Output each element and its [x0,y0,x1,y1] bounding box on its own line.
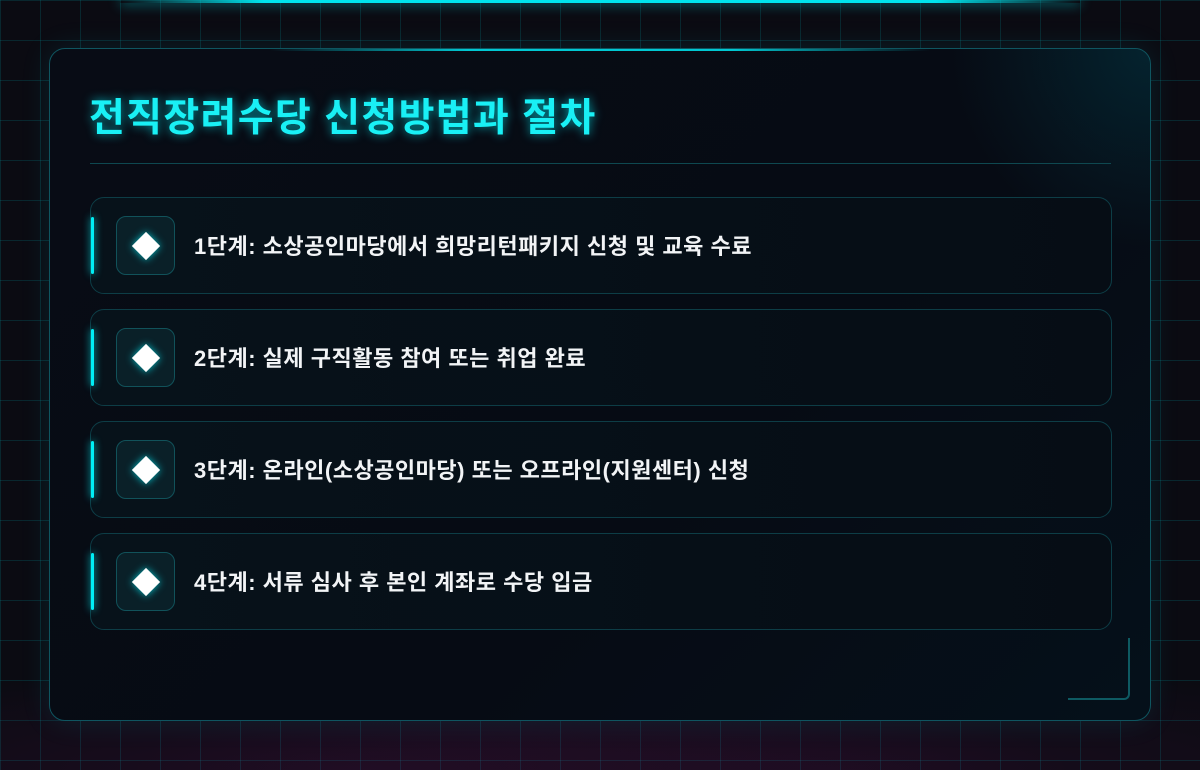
title: 전직장려수당 신청방법과 절차 [89,97,597,140]
text: step 1: 1단계: 소상공인마당에서 희망리턴패키지 신청 및 교육 수료 [194,234,752,259]
step 1 [90,197,1112,294]
icon: diamond [116,552,175,611]
icon: diamond [116,328,175,387]
icon: diamond [116,216,175,275]
text: step 4: 4단계: 서류 심사 후 본인 계좌로 수당 입금 [194,570,593,595]
icon: diamond [116,440,175,499]
decoration: corner bracket [1068,638,1130,700]
step 3 [90,421,1112,518]
text: step 2: 2단계: 실제 구직활동 참여 또는 취업 완료 [194,346,586,371]
step 4 [90,533,1112,630]
step 2 [90,309,1112,406]
text: step 3: 3단계: 온라인(소상공인마당) 또는 오프라인(지원센터) 신청 [194,458,749,483]
